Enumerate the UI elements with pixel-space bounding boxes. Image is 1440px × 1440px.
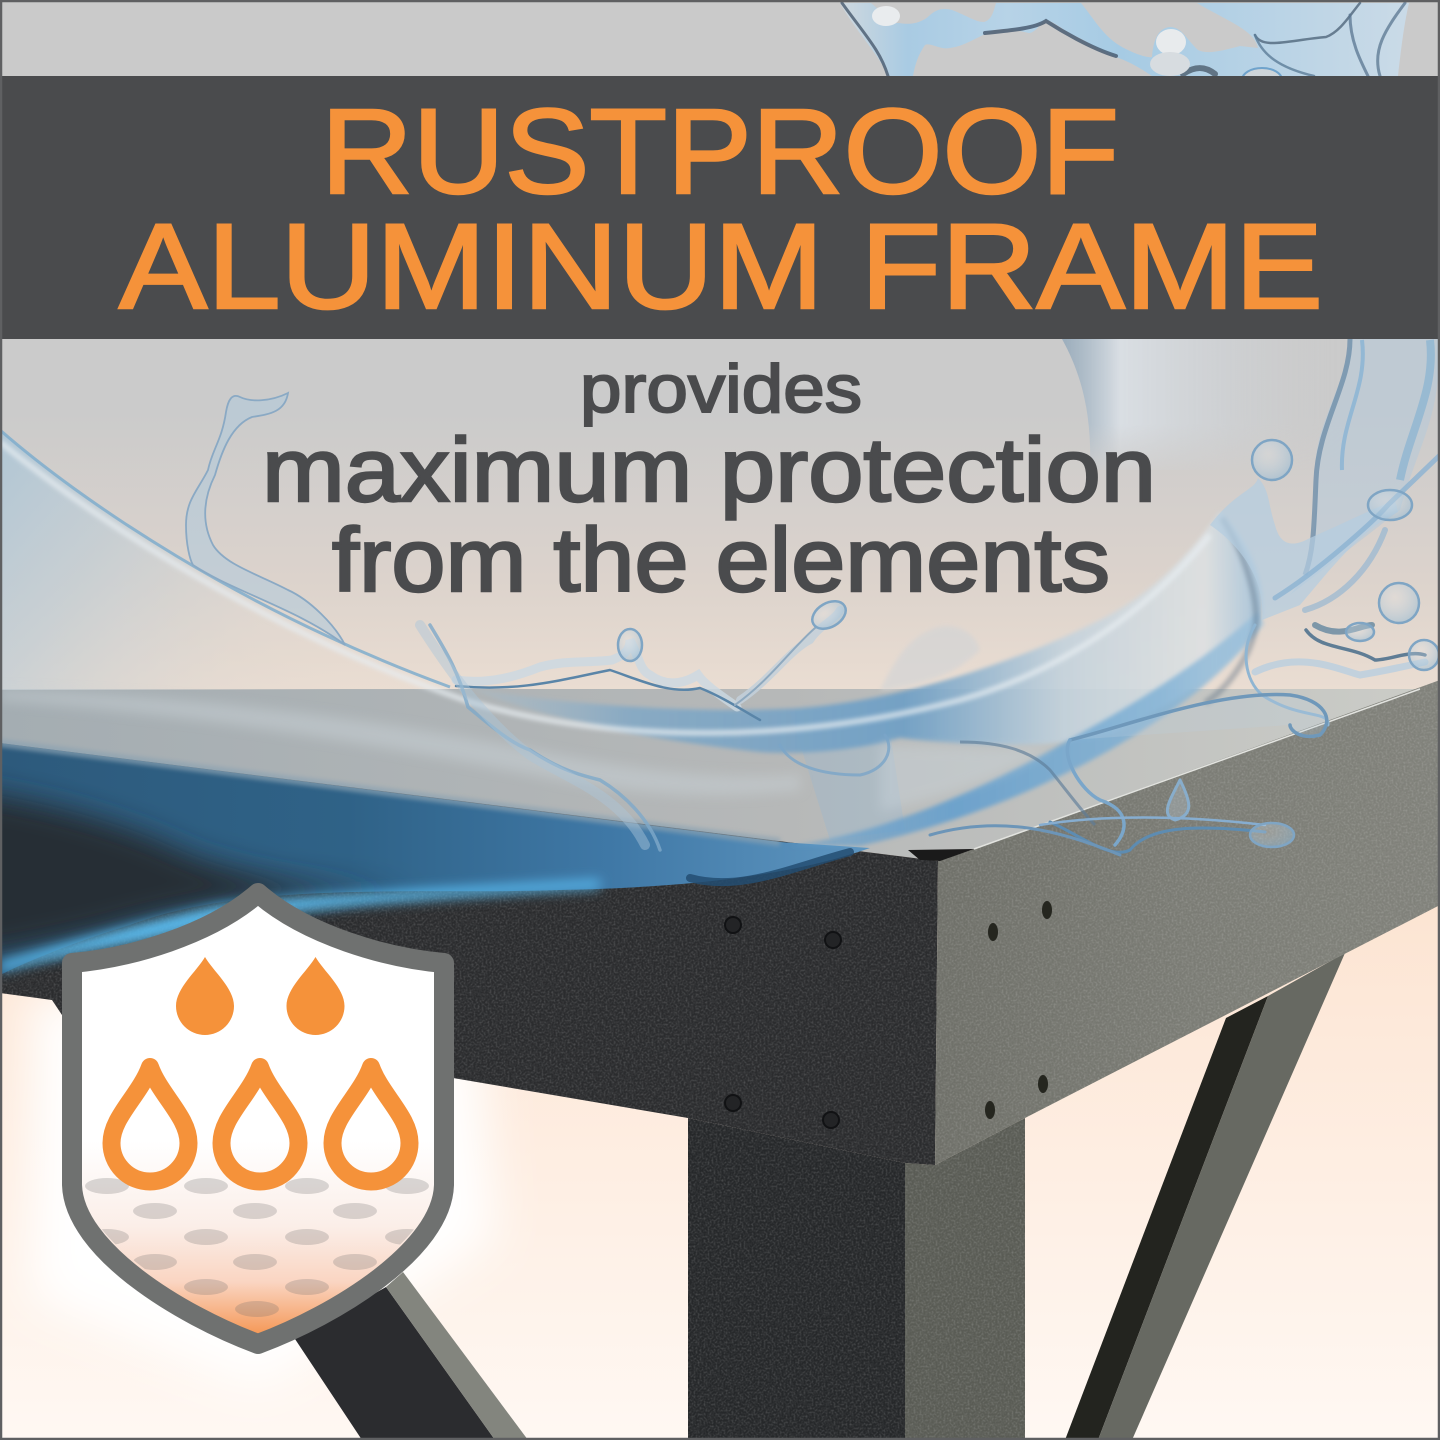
pale stripes over top surface — [0, 690, 800, 795]
corner translucent block — [804, 742, 903, 838]
aluminum frame — [0, 680, 1440, 1440]
splash right mass — [1197, 3, 1409, 76]
charcoal wedge beneath water — [0, 790, 420, 958]
shield body — [72, 893, 444, 1344]
subhead: from the elements: from the elements — [332, 511, 1110, 611]
splash highlights and edges — [842, 3, 1405, 76]
right tendrils — [930, 455, 1440, 855]
bright blue underglow — [0, 880, 600, 972]
lower blue band — [790, 612, 1264, 846]
shield glow — [30, 990, 495, 1390]
leg — [688, 1118, 1025, 1440]
blue main ribbon and crescent — [470, 511, 1263, 753]
corner notch — [908, 849, 974, 861]
crescent crown and arm — [1210, 478, 1398, 620]
front dark beam face — [0, 743, 938, 1165]
headline: rustproof: RUSTPROOF — [321, 83, 1119, 219]
headline: aluminum frame: ALUMINUM FRAME — [119, 198, 1323, 334]
subhead: maximum protection: maximum protection — [262, 421, 1156, 521]
left tendril — [186, 393, 345, 645]
soft crown shape over horizon — [880, 626, 980, 690]
droplets — [618, 440, 1439, 847]
water splash — [0, 339, 1440, 975]
large pale water drop upper right — [1062, 339, 1228, 460]
blurred transition on blue edge — [0, 743, 780, 842]
left water sheet above the horizon — [2, 434, 310, 690]
crest highlight along main curve — [0, 442, 1210, 733]
water splash at top — [840, 3, 1409, 92]
left diagonal brace — [295, 1272, 528, 1440]
right diagonal brace — [1065, 953, 1345, 1440]
shield pores — [85, 1178, 429, 1317]
background: grey to peach sky — [0, 0, 1440, 690]
blue water underside — [0, 743, 870, 975]
icon: water shield — [72, 893, 444, 1344]
bolts on grey face — [985, 901, 1052, 1119]
pale water over surface near corner — [883, 746, 1030, 806]
crescent inner rib — [1205, 518, 1256, 703]
dark tendril under body — [960, 742, 1095, 825]
splash left stream — [840, 3, 1260, 76]
subhead: provides: provides — [580, 351, 862, 427]
right water column — [1302, 339, 1438, 575]
outlined drops — [112, 1067, 410, 1182]
background: lower peach to white — [0, 689, 1440, 1440]
top surface of frame — [0, 689, 1420, 861]
middle tendrils and drops — [420, 610, 889, 882]
bolts on dark face — [725, 917, 841, 1128]
headline band — [0, 76, 1440, 339]
side grey beam face — [935, 680, 1440, 1165]
solid drops — [176, 957, 344, 1035]
